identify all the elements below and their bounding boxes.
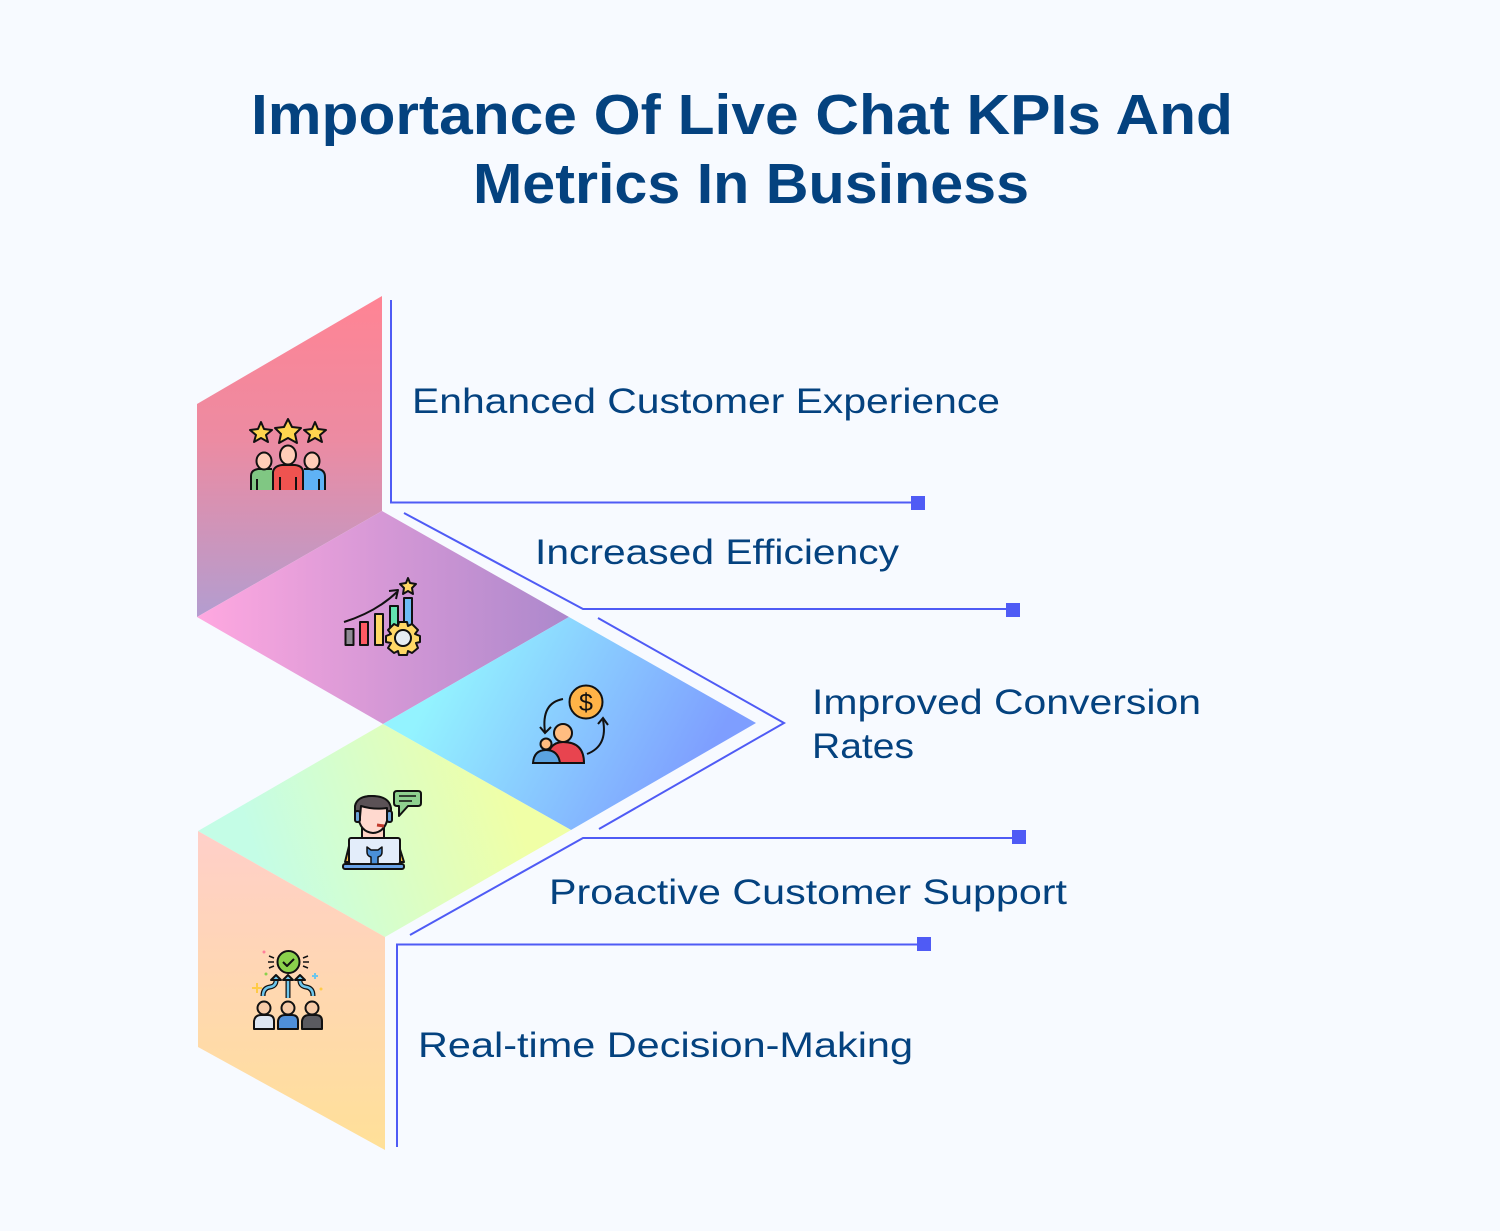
label: proactive customer support: Proactive Customer Support [549,873,1067,912]
icon: customers with star ratings [250,419,326,490]
label: improved conversion rates: Rates [812,727,914,766]
panel: enhanced customer experience [197,296,382,617]
title [251,83,1233,216]
panel: increased efficiency [197,511,569,724]
label: improved conversion rates: Improved Conversion [812,683,1201,722]
connector: enhanced customer experience [391,300,925,510]
connector: improved conversion rates chevron [598,618,784,829]
icon: team decision making [252,950,322,1029]
panel: improved conversion rates [383,617,756,830]
connector: proactive customer support [410,830,1026,935]
icon: customer and money cycle [533,686,608,763]
panel: proactive customer support [198,724,571,937]
label: enhanced customer experience: Enhanced Customer Experience [412,382,1000,421]
label: real-time decision-making: Real-time Decision-Making [418,1026,913,1065]
connector: increased efficiency [404,513,1020,617]
title: Importance Of Live Chat KPIs And [251,83,1233,147]
icon: customer and money cycle: $ [579,689,593,717]
connector: real-time decision-making [397,937,931,1147]
title: Metrics In Business [473,152,1029,216]
label: improved conversion rates [812,683,1201,766]
label: increased efficiency: Increased Efficiency [535,533,900,572]
icon: growth chart with gear [344,578,420,655]
panel: real-time decision-making [198,831,385,1150]
icon: support agent with laptop [343,791,421,869]
